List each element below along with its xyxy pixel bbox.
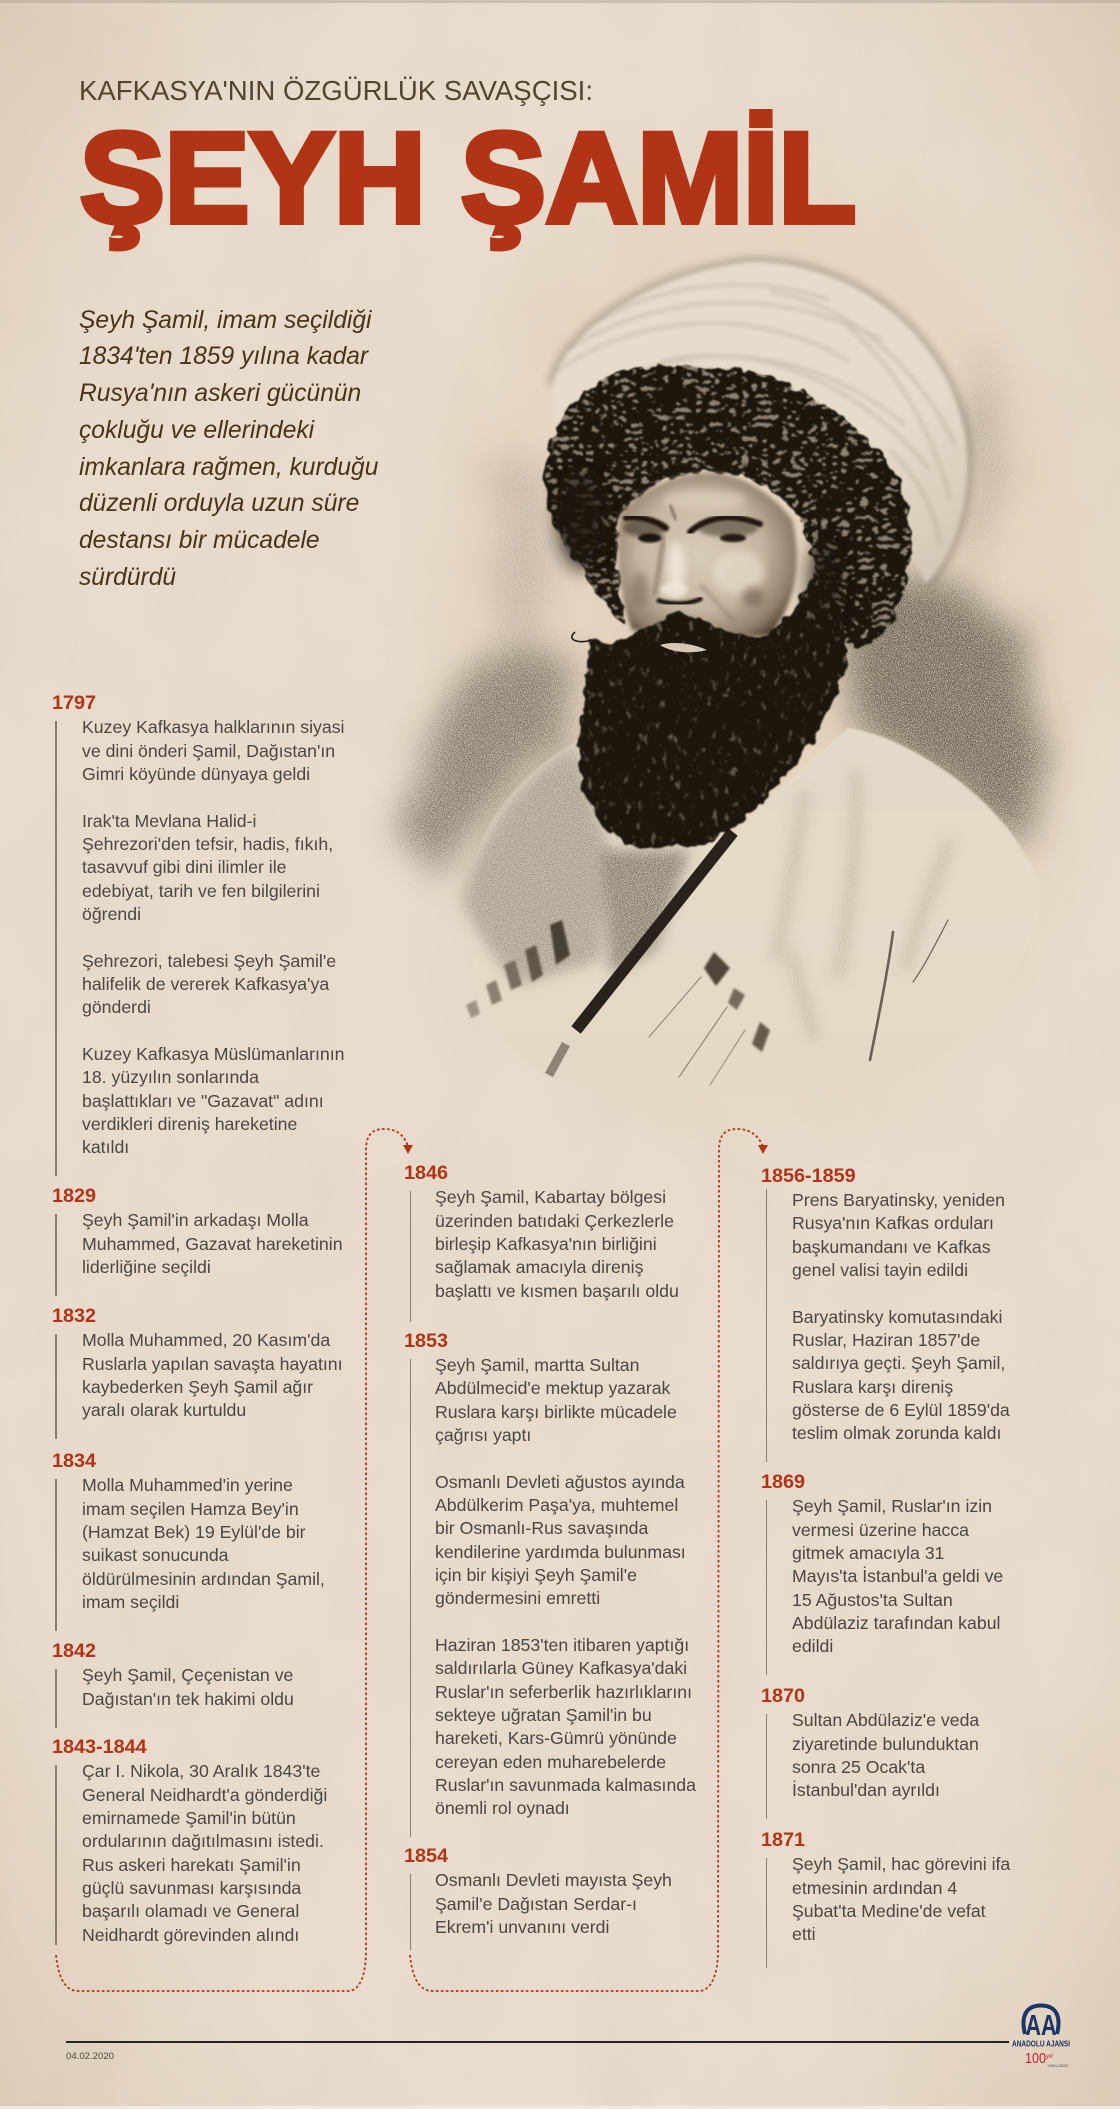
intro paragraph: düzenli orduyla uzun süre: [79, 490, 359, 517]
timeline entry: 1843-1844: ordularının dağıtılmasını istedi.: [82, 1831, 324, 1851]
timeline entry: 1854: Şamil'e Dağıstan Serdar-ı: [435, 1894, 637, 1914]
robe: [462, 728, 1040, 1095]
timeline entry: 1832: Ruslarla yapılan savaşta hayatını: [82, 1354, 343, 1374]
timeline entry: 1853: Abdülmecid'e mektup yazarak: [435, 1378, 670, 1398]
timeline entry: 1832: yaralı olarak kurtuldu: [82, 1400, 246, 1420]
timeline entry: 1797: verdikleri direniş hareketine: [82, 1114, 297, 1134]
timeline entry: 1853: göndermesini emretti: [435, 1588, 600, 1608]
timeline entry: 1856-1859: gösterse de 6 Eylül 1859'da: [792, 1400, 1010, 1420]
robe shading: [462, 745, 950, 1040]
timeline entry: 1843-1844: Çar I. Nikola, 30 Aralık 1843'te: [82, 1761, 320, 1781]
dotted connector arrow: column 2 to column 3: [410, 1129, 768, 1991]
logo: Anadolu Ajansı: [1012, 2006, 1070, 2068]
timeline entry: 1832: 1832: [52, 1305, 96, 1327]
timeline entry: 1853: için bir kişiyi Şeyh Şamil'e: [435, 1565, 637, 1585]
timeline entry: 1843-1844: 1843-1844: [52, 1736, 147, 1758]
timeline entry: 1846: 1846: [404, 1162, 448, 1184]
timeline entry: 1842: Şeyh Şamil, Çeçenistan ve: [82, 1665, 293, 1685]
timeline entry: 1843-1844: [52, 1736, 327, 1945]
beard and moustache: [572, 570, 855, 860]
shoulder strap and sword sheath: [549, 832, 733, 1078]
timeline entry: 1853: 1853: [404, 1330, 448, 1352]
timeline entry: 1834: [52, 1450, 325, 1631]
timeline entry: 1853: bir Osmanlı-Rus savaşında: [435, 1518, 648, 1538]
timeline entry: 1797: Kuzey Kafkasya Müslümanlarının: [82, 1044, 344, 1064]
timeline entry: 1869: 1869: [761, 1471, 805, 1493]
timeline entry: 1797: Gimri köyünde dünyaya geldi: [82, 764, 310, 784]
timeline entry: 1834: (Hamzat Bek) 19 Eylül'de bir: [82, 1522, 306, 1542]
timeline entry: 1853: [404, 1330, 696, 1837]
logo: Anadolu Ajansı: 1920-2020: [1047, 2063, 1069, 2068]
timeline entry: 1829: [52, 1185, 343, 1296]
timeline entry: 1853: Osmanlı Devleti ağustos ayında: [435, 1472, 685, 1492]
face: [618, 473, 797, 640]
timeline entry: 1797: 1797: [52, 692, 96, 714]
footer rule: [66, 2041, 1009, 2043]
timeline entry: 1829: Muhammed, Gazavat hareketinin: [82, 1234, 343, 1254]
timeline entry: 1842: Dağıstan'ın tek hakimi oldu: [82, 1689, 294, 1709]
timeline entry: 1870: [761, 1685, 980, 1819]
timeline entry: 1856-1859: saldırıya geçti. Şeyh Şamil,: [792, 1353, 1005, 1373]
timeline entry: 1869: 15 Ağustos'ta Sultan: [792, 1590, 953, 1610]
timeline entry: 1797: öğrendi: [82, 904, 141, 924]
intro paragraph: [79, 307, 378, 591]
logo: Anadolu Ajansı: AA: [1026, 2010, 1057, 2042]
timeline entry: 1853: Abdülkerim Paşa'ya, muhtemel: [435, 1495, 678, 1515]
timeline entry: 1832: [52, 1305, 343, 1439]
timeline entry: 1797: Şehrezori'den tefsir, hadis, fıkıh,: [82, 834, 333, 854]
timeline entry: 1853: cereyan eden muharebelerde: [435, 1752, 666, 1772]
intro paragraph: Şeyh Şamil, imam seçildiği: [79, 307, 371, 334]
timeline entry: 1853: Ruslar'ın savunmada kalmasında: [435, 1775, 696, 1795]
timeline entry: 1856-1859: [761, 1165, 1010, 1462]
intro paragraph: çokluğu ve ellerindeki: [79, 417, 314, 444]
timeline entry: 1832: kaybederken Şeyh Şamil ağır: [82, 1377, 313, 1397]
timeline entry: 1856-1859: Prens Baryatinsky, yeniden: [792, 1190, 1005, 1210]
timeline entry: 1846: üzerinden batıdaki Çerkezlerle: [435, 1211, 674, 1231]
timeline entry: 1869: gitmek amacıyla 31: [792, 1543, 944, 1563]
timeline entry: 1856-1859: başkumandanı ve Kafkas: [792, 1237, 991, 1257]
intro paragraph: destansı bir mücadele: [79, 527, 320, 554]
timeline entry: 1871: Şeyh Şamil, hac görevini ifa: [792, 1854, 1010, 1874]
main title: ŞEYH ŞAMİL: [80, 107, 856, 250]
timeline entry: 1834: 1834: [52, 1450, 96, 1472]
timeline entry: 1853: Ruslar'ın seferberlik hazırlıklarını: [435, 1682, 692, 1702]
timeline entry: 1870: İstanbul'dan ayrıldı: [792, 1780, 940, 1800]
timeline entry: 1869: Mayıs'ta İstanbul'a geldi ve: [792, 1566, 1003, 1586]
timeline entry: 1853: çağrısı yaptı: [435, 1425, 531, 1445]
timeline entry: 1797: tasavvuf gibi dini ilimler ile: [82, 857, 286, 877]
turban: [553, 262, 967, 585]
timeline entry: 1846: sağlamak amacıyla direniş: [435, 1257, 643, 1277]
intro paragraph: 1834'ten 1859 yılına kadar: [79, 343, 368, 370]
timeline entry: 1854: Ekrem'i unvanını verdi: [435, 1917, 609, 1937]
timeline entry: 1869: Şeyh Şamil, Ruslar'ın izin: [792, 1496, 992, 1516]
timeline entry: 1853: hareketi, Kars-Gümrü yönünde: [435, 1728, 677, 1748]
timeline entry: 1797: gönderdi: [82, 997, 151, 1017]
timeline entry: 1856-1859: Ruslara karşı direniş: [792, 1377, 953, 1397]
logo: Anadolu Ajansı: yıl: [1045, 2053, 1053, 2060]
timeline entry: 1853: kendilerine yardımda bulunması: [435, 1542, 686, 1562]
timeline entry: 1797: Kuzey Kafkasya halklarının siyasi: [82, 717, 344, 737]
timeline entry: 1829: 1829: [52, 1185, 96, 1207]
timeline entry: 1871: etmesinin ardından 4: [792, 1878, 957, 1898]
intro paragraph: Rusya'nın askeri gücünün: [79, 380, 361, 407]
timeline entry: 1853: Ruslara karşı birlikte mücadele: [435, 1402, 677, 1422]
timeline entry: 1846: [404, 1162, 679, 1322]
intro paragraph: sürdürdü: [79, 564, 176, 591]
timeline entry: 1856-1859: Rusya'nın Kafkas orduları: [792, 1213, 994, 1233]
timeline entry: 1854: 1854: [404, 1845, 448, 1867]
date: 04.02.2020: [66, 2051, 114, 2062]
timeline entry: 1869: [761, 1471, 1003, 1675]
timeline entry: 1842: 1842: [52, 1640, 96, 1662]
timeline entry: 1871: Şubat'ta Medine'de vefat: [792, 1901, 986, 1921]
timeline entry: 1854: [404, 1845, 672, 1950]
timeline entry: 1797: edebiyat, tarih ve fen bilgilerini: [82, 881, 320, 901]
timeline entry: 1797: Şehrezori, talebesi Şeyh Şamil'e: [82, 951, 336, 971]
timeline entry: 1871: etti: [792, 1924, 816, 1944]
timeline entry: 1834: suikast sonucunda: [82, 1545, 229, 1565]
timeline entry: 1856-1859: 1856-1859: [761, 1165, 856, 1187]
dotted connector arrow: column 1 to column 2: [56, 1129, 413, 1991]
timeline entry: 1854: Osmanlı Devleti mayısta Şeyh: [435, 1870, 672, 1890]
timeline entry: 1797: ve dini önderi Şamil, Dağıstan'ın: [82, 741, 335, 761]
timeline entry: 1797: Irak'ta Mevlana Halid-i: [82, 811, 256, 831]
timeline entry: 1853: Haziran 1853'ten itibaren yaptığı: [435, 1635, 689, 1655]
timeline entry: 1871: 1871: [761, 1829, 805, 1851]
timeline entry: 1870: Sultan Abdülaziz'e veda: [792, 1710, 979, 1730]
timeline entry: 1834: imam seçildi: [82, 1592, 179, 1612]
cartridge rows: [466, 920, 770, 1052]
timeline entry: 1853: Şeyh Şamil, martta Sultan: [435, 1355, 639, 1375]
timeline entry: 1829: Şeyh Şamil'in arkadaşı Molla: [82, 1210, 309, 1230]
timeline entry: 1870: sonra 25 Ocak'ta: [792, 1757, 925, 1777]
timeline entry: 1846: başlattı ve kısmen başarılı oldu: [435, 1281, 679, 1301]
timeline entry: 1797: 18. yüzyılın sonlarında: [82, 1067, 259, 1087]
timeline entry: 1869: vermesi üzerine hacca: [792, 1520, 969, 1540]
timeline entry: 1834: öldürülmesinin ardından Şamil,: [82, 1569, 325, 1589]
timeline entry: 1853: saldırılarla Güney Kafkasya'daki: [435, 1658, 687, 1678]
timeline entry: 1853: sekteye uğratan Şamil'in bu: [435, 1705, 652, 1725]
timeline entry: 1832: Molla Muhammed, 20 Kasım'da: [82, 1330, 330, 1350]
timeline entry: 1846: birleşip Kafkasya'nın birliğini: [435, 1234, 657, 1254]
sketched background shading: [402, 340, 1045, 870]
timeline entry: 1843-1844: Rus askeri harekatı Şamil'in: [82, 1855, 301, 1875]
logo: Anadolu Ajansı: 100: [1025, 2050, 1046, 2067]
timeline entry: 1856-1859: Baryatinsky komutasındaki: [792, 1307, 1002, 1327]
subtitle: KAFKASYA'NIN ÖZGÜRLÜK SAVAŞÇISI:: [79, 75, 593, 106]
timeline entry: 1853: önemli rol oynadı: [435, 1798, 570, 1818]
timeline entry: 1843-1844: başarılı olamadı ve General: [82, 1901, 299, 1921]
timeline entry: 1829: liderliğine seçildi: [82, 1257, 211, 1277]
timeline entry: 1834: Molla Muhammed'in yerine: [82, 1475, 293, 1495]
logo: Anadolu Ajansı: ANADOLU AJANSI: [1012, 2040, 1070, 2048]
timeline entry: 1869: Abdülaziz tarafından kabul: [792, 1613, 1000, 1633]
timeline entry: 1871: [761, 1829, 1010, 1968]
timeline entry: 1870: 1870: [761, 1685, 805, 1707]
timeline entry: 1869: edildi: [792, 1636, 833, 1656]
timeline entry: 1797: katıldı: [82, 1137, 129, 1157]
timeline entry: 1856-1859: genel valisi tayin edildi: [792, 1260, 968, 1280]
timeline entry: 1797: başlattıkları ve "Gazavat" adını: [82, 1090, 324, 1110]
timeline entry: 1843-1844: güçlü savunması karşısında: [82, 1878, 301, 1898]
timeline entry: 1843-1844: Neidhardt görevinden alındı: [82, 1925, 299, 1945]
intro paragraph: imkanlara rağmen, kurduğu: [79, 454, 378, 481]
timeline entry: 1856-1859: teslim olmak zorunda kaldı: [792, 1423, 1001, 1443]
portrait of Şeyh Şamil: [402, 262, 1045, 1095]
timeline entry: 1797: halifelik de vererek Kafkasya'ya: [82, 974, 329, 994]
timeline entry: 1842: [52, 1640, 294, 1728]
timeline entry: 1846: Şeyh Şamil, Kabartay bölgesi: [435, 1187, 666, 1207]
timeline entry: 1856-1859: Ruslar, Haziran 1857'de: [792, 1330, 980, 1350]
fur hat: [540, 360, 920, 650]
timeline entry: 1843-1844: General Neidhardt'a gönderdiği: [82, 1785, 327, 1805]
timeline entry: 1870: ziyaretinde bulunduktan: [792, 1734, 979, 1754]
timeline entry: 1797: [52, 692, 344, 1176]
timeline entry: 1834: imam seçilen Hamza Bey'in: [82, 1499, 299, 1519]
timeline entry: 1843-1844: emirnamede Şamil'in bütün: [82, 1808, 296, 1828]
